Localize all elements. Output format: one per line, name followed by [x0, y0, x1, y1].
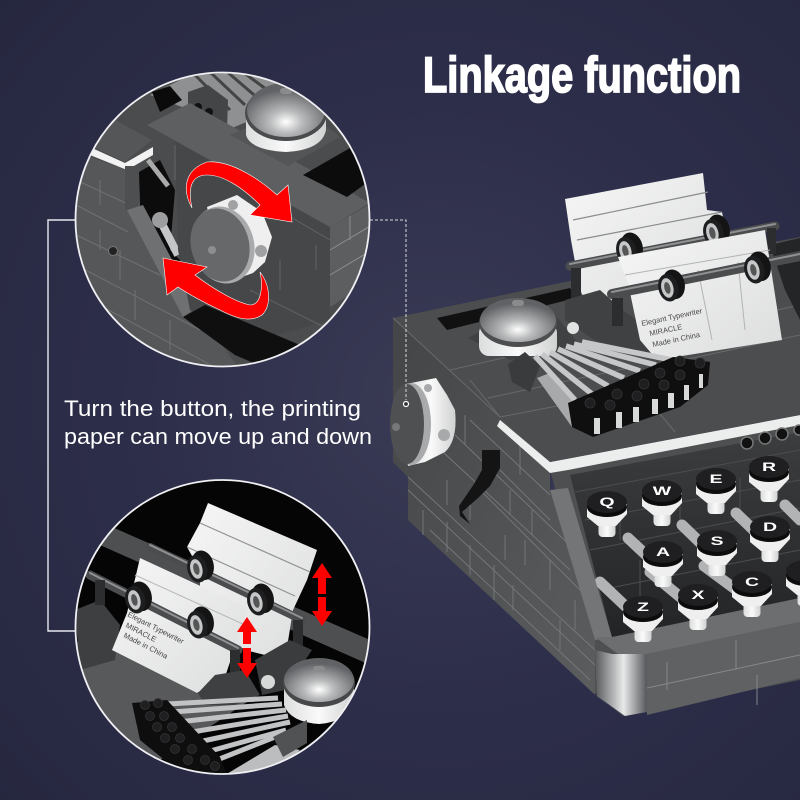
key E: [696, 468, 736, 514]
key D: D: [763, 521, 777, 534]
key S: S: [710, 535, 724, 548]
main typewriter model: [390, 173, 800, 716]
left brick wall: [76, 158, 236, 366]
front top white strip: [497, 415, 800, 473]
black type block with studs: [568, 356, 710, 437]
small stud: [567, 322, 579, 334]
bottom slot: [183, 305, 298, 362]
key C: C: [745, 576, 760, 589]
key D: [750, 516, 790, 562]
key A: A: [656, 546, 671, 559]
side stair notch: [459, 450, 500, 524]
front roller bar: [90, 573, 240, 675]
bracket connector between circles: [48, 220, 76, 631]
base rounded corner: [595, 650, 647, 716]
key C: [732, 571, 772, 617]
key Q: [587, 491, 627, 537]
typewriter side wall: [393, 318, 623, 716]
opening slot on deck: [437, 288, 576, 330]
slanted trim: [127, 205, 197, 317]
right wall bricks: [330, 203, 372, 307]
left dark mechanism: [75, 600, 120, 670]
key bars: [600, 505, 800, 620]
front paper with printed label: Made in China: [652, 330, 702, 349]
wall behind knob: [178, 246, 197, 312]
top strip of deck: [147, 103, 370, 227]
back paper: [565, 173, 730, 310]
hammer fan: [535, 342, 672, 400]
support block: [565, 290, 662, 352]
back roller bar: [570, 212, 776, 298]
gray studs below fan: [537, 372, 590, 427]
key Q: Q: [599, 496, 615, 509]
plate under bell: [230, 126, 340, 166]
key X: [678, 584, 718, 630]
upper left deck and white strip: [90, 120, 153, 210]
base front panel: [647, 622, 800, 715]
front paper with printed label: Elegant Typewriter: [641, 306, 704, 328]
gray band rail: [100, 527, 370, 665]
typewriter front face: [550, 424, 800, 716]
black type block: [132, 698, 227, 775]
key V partial: [786, 560, 800, 606]
right slot: [770, 238, 800, 320]
bell cap: [283, 658, 355, 724]
black window: [303, 148, 368, 197]
keyboard well: [570, 432, 800, 638]
front roller bar: [612, 249, 800, 326]
key Z: [623, 596, 663, 642]
bell cap: [245, 83, 327, 152]
key R: R: [762, 461, 777, 474]
red arrow: clockwise top: [186, 162, 292, 222]
back paper stack: [187, 503, 317, 660]
front paper with printed label: [112, 558, 248, 693]
hammer fan: [167, 698, 290, 762]
top black area and hinge: [150, 74, 277, 128]
key W: W: [653, 485, 672, 498]
key X: X: [691, 589, 705, 602]
description text: paper can move up and down: [64, 424, 372, 449]
top row holes: [741, 425, 800, 449]
bell cap: [479, 298, 557, 356]
key S: [697, 530, 737, 576]
description text: [64, 396, 372, 449]
turning knob: [390, 378, 456, 466]
top deck: [393, 237, 800, 462]
description text: Turn the button, the printing: [64, 396, 361, 421]
knob: [190, 195, 272, 284]
base front lip: [595, 598, 800, 654]
front paper with printed label: MIRACLE: [649, 322, 683, 338]
front paper with printed label: MIRACLE: [124, 621, 158, 644]
left gray floor: [77, 642, 247, 760]
black opening with linkage: [139, 158, 180, 262]
red arrow: clockwise bottom: [163, 258, 269, 319]
circle callout: paper roller detail: [70, 478, 375, 780]
support blocks: [198, 670, 260, 705]
key W: [642, 480, 682, 526]
small gray block: [508, 352, 540, 392]
bell plate: [468, 315, 580, 360]
key Z: Z: [637, 601, 649, 614]
front paper with printed label: Made in China: [122, 631, 170, 661]
dashed connector to knob: [370, 220, 408, 406]
key E: E: [709, 473, 723, 486]
keys: [587, 456, 800, 642]
circle callout: turning knob detail: [70, 70, 375, 370]
gray floor studs: [228, 745, 300, 773]
small stud: [261, 675, 275, 689]
front paper with printed label: Elegant Typewriter: [126, 610, 186, 646]
key A: [643, 541, 683, 587]
double arrow: left: [237, 617, 257, 678]
gray block: [273, 720, 307, 757]
double arrow: right: [312, 563, 332, 626]
back roller bar: [150, 545, 303, 650]
key R: [749, 456, 789, 502]
front paper with printed label: [618, 230, 782, 360]
slanted side trim: [550, 488, 612, 640]
